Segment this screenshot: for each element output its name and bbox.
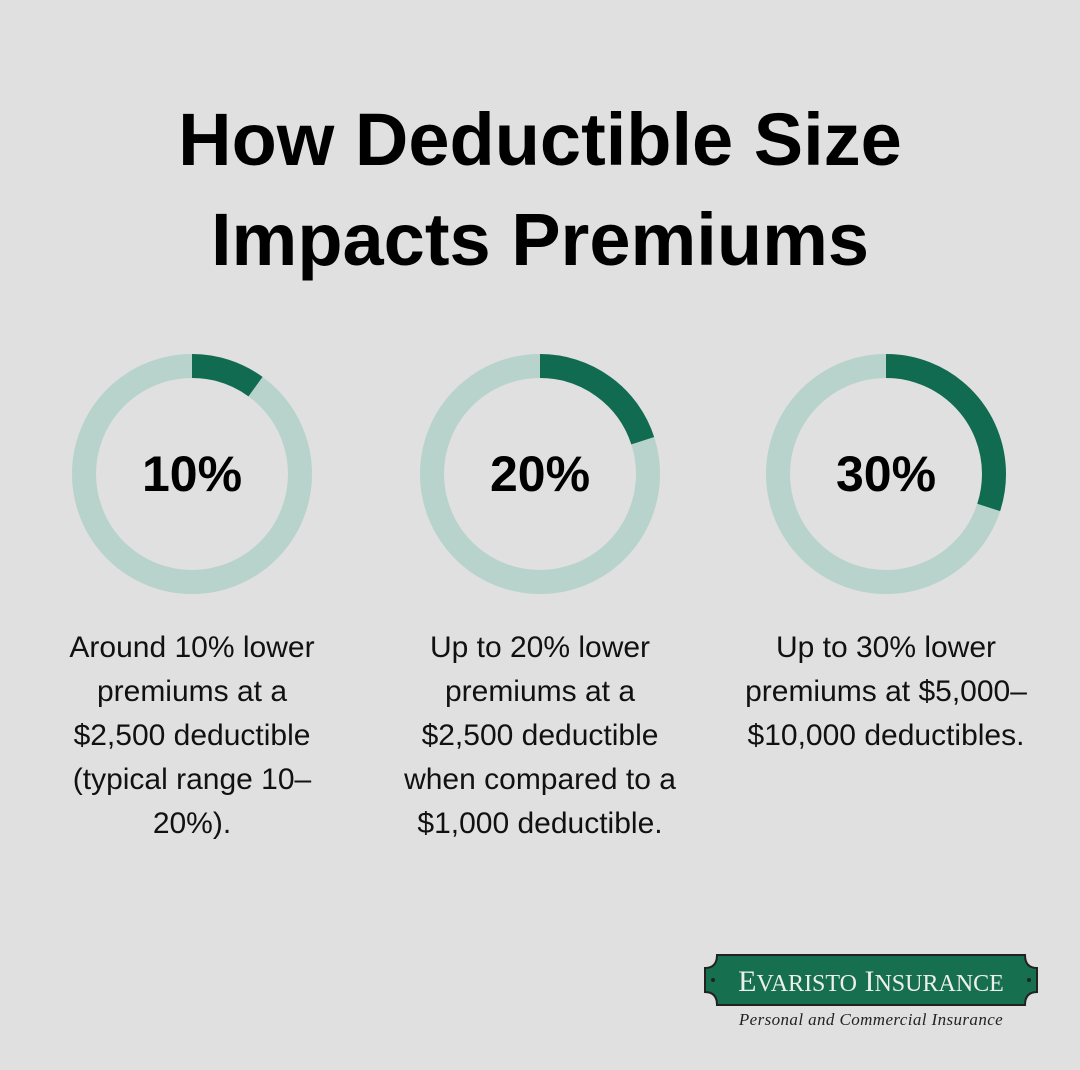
text: 30% description: Up to 30% lower bbox=[776, 631, 996, 664]
donut: 10% bbox=[84, 366, 300, 582]
text: 30% description: premiums at $5,000– bbox=[745, 675, 1027, 708]
donut charts bbox=[72, 354, 1006, 594]
logo bbox=[704, 954, 1038, 1029]
text: 10% description: 20%). bbox=[153, 807, 231, 840]
text: 30% description bbox=[745, 631, 1027, 752]
donut: 30% bbox=[778, 366, 994, 582]
text: 20% description: $1,000 deductible. bbox=[417, 807, 663, 840]
text: 10% description: (typical range 10– bbox=[73, 763, 311, 796]
text: 20% description: when compared to a bbox=[404, 763, 676, 796]
donut: 20%: 20% bbox=[490, 446, 590, 502]
title: Impacts Premiums bbox=[211, 198, 869, 281]
text: 10% description: Around 10% lower bbox=[69, 631, 315, 664]
logo: Personal and Commercial Insurance bbox=[739, 1010, 1003, 1029]
logo: EVARISTO INSURANCE bbox=[738, 965, 1004, 998]
title: How Deductible Size bbox=[178, 98, 902, 181]
text: 20% description bbox=[404, 631, 676, 840]
text: 10% description: premiums at a bbox=[97, 675, 287, 708]
text: 20% description: Up to 20% lower bbox=[430, 631, 650, 664]
text: 10% description: $2,500 deductible bbox=[74, 719, 310, 752]
text: 30% description: $10,000 deductibles. bbox=[748, 719, 1024, 752]
text: 10% description bbox=[69, 631, 315, 840]
donut: 20% bbox=[432, 366, 648, 582]
text: 20% description: $2,500 deductible bbox=[422, 719, 658, 752]
text: 20% description: premiums at a bbox=[445, 675, 635, 708]
donut: 10%: 10% bbox=[142, 446, 242, 502]
donut: 30%: 30% bbox=[836, 446, 936, 502]
title bbox=[178, 98, 902, 281]
